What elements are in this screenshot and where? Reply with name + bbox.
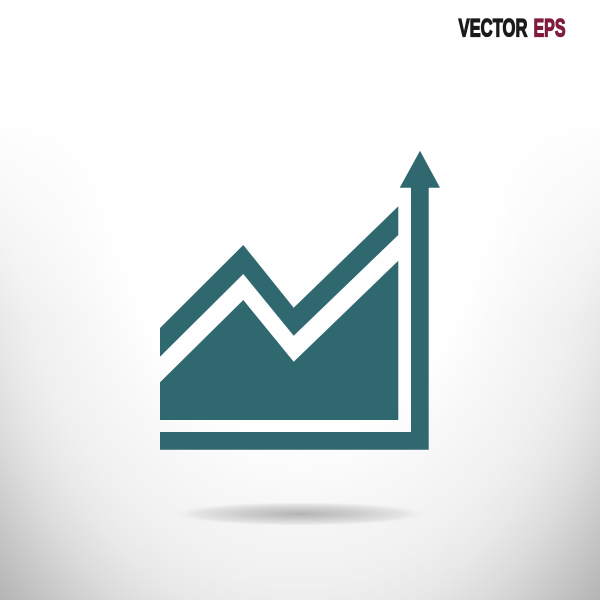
icon: rising area chart with arrow (160, 151, 440, 450)
chart upper band (160, 206, 398, 357)
chart filled area (160, 261, 398, 420)
title: vector eps badge (458, 14, 566, 42)
text: eps: EPS (534, 14, 566, 42)
axis with up arrow (160, 151, 440, 450)
drop shadow ellipse (170, 502, 430, 526)
text: vector: VECTOR (458, 14, 528, 42)
